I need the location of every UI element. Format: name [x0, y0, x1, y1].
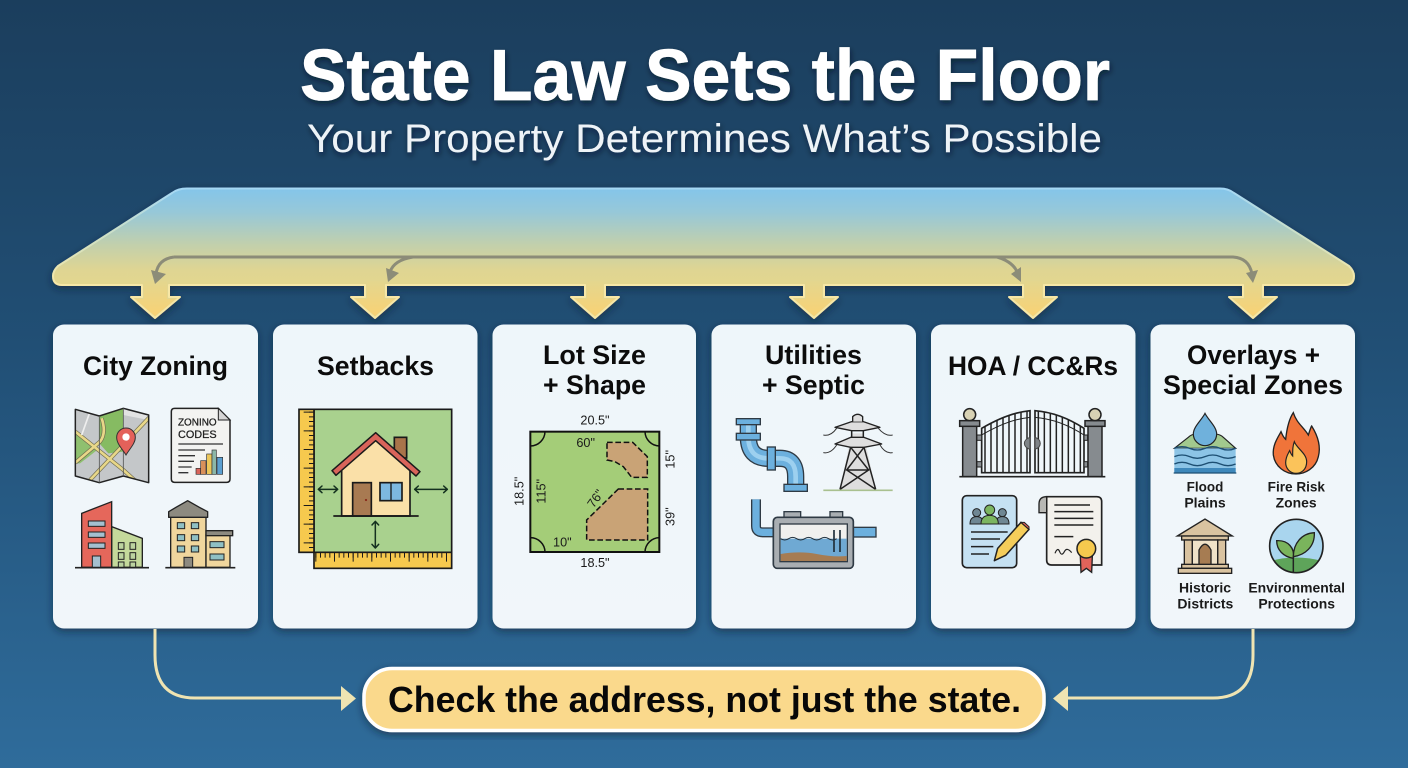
icon: map: [73, 407, 150, 485]
dimension labels: 10": [553, 536, 572, 550]
historic districts label: Districts: [1177, 595, 1234, 611]
icon: zoning codes document: [171, 408, 230, 482]
icon: zoning codes document: ZONINO: [178, 417, 217, 428]
flood plains label: Plains: [1184, 495, 1226, 511]
environmental protections label: Protections: [1258, 595, 1335, 611]
setback arrows: [318, 486, 447, 548]
dimension labels: 20.5": [580, 414, 610, 428]
callout: [364, 668, 1044, 730]
icon: certificate: [1039, 497, 1102, 572]
icon: bottom ruler: [314, 552, 452, 568]
icon: power tower: [823, 414, 893, 490]
heading: [1163, 340, 1343, 400]
icon: left ruler: [299, 409, 314, 552]
card: City Zoning: [53, 324, 258, 628]
heading: + Septic: [762, 370, 865, 400]
historic districts label: [1177, 580, 1234, 611]
utility icons: [736, 414, 893, 568]
card: HOA / CC&Rs: [931, 324, 1136, 628]
card: Utilities + Septic: [712, 324, 916, 628]
dimension labels: 18.5": [580, 556, 610, 570]
icon: environmental circle: [1268, 519, 1325, 575]
arrow tips glow: [135, 281, 1273, 316]
icon: house: [332, 433, 420, 516]
lot outline: [530, 432, 659, 552]
dimension labels: 15": [663, 450, 677, 469]
heading: [762, 340, 865, 400]
grey arrowheads: [151, 267, 1258, 284]
state law floor banner with arrows: [53, 188, 1354, 318]
icon: fire: [1273, 413, 1319, 474]
icon: pipe: [736, 419, 807, 491]
setback diagram: [299, 409, 452, 568]
environmental protections label: [1248, 580, 1345, 611]
icon: zoning codes document: CODES: [178, 429, 217, 441]
card: Setbacks: [273, 324, 478, 628]
zone icons: [1174, 413, 1345, 611]
corner arcs: [530, 432, 659, 552]
heading: Lot Size: [543, 340, 646, 370]
buildable areas: [587, 442, 648, 540]
environmental protections label: Environmental: [1248, 580, 1345, 596]
heading: Setbacks: [317, 351, 434, 381]
icon: flood: [1174, 413, 1236, 473]
icon: apartment building: [165, 501, 235, 568]
fire risk label: Fire Risk: [1268, 479, 1325, 495]
dimension labels: 115": [535, 479, 549, 504]
fire risk label: [1268, 479, 1325, 511]
icon: member form with pencil: [962, 496, 1029, 568]
dimension labels: 18.5": [513, 477, 527, 506]
dimension labels: 39": [663, 507, 677, 526]
card: Overlays + Special Zones: [1150, 324, 1355, 628]
heading: Utilities: [765, 340, 862, 370]
icon: septic tank: [756, 499, 876, 568]
heading: [543, 340, 646, 400]
HOA icons: [959, 409, 1105, 572]
dimension labels: 60": [576, 436, 595, 450]
icon: red and green buildings: [75, 502, 149, 568]
subtitle: Your Property Determines What’s Possible: [307, 117, 1102, 161]
banner trapezoid: [53, 188, 1354, 318]
title: State Law Sets the Floor: [300, 36, 1110, 116]
flood plains label: [1184, 479, 1226, 511]
right connector arrow: [1053, 629, 1253, 711]
historic districts label: Historic: [1179, 580, 1231, 596]
flood plains label: Flood: [1187, 479, 1223, 495]
heading: HOA / CC&Rs: [948, 351, 1118, 381]
dimension labels: [513, 414, 677, 570]
dimension labels: 76": [585, 487, 607, 510]
heading: City Zoning: [83, 351, 228, 381]
callout: Check the address, not just the state.: [388, 679, 1021, 720]
fire risk label: Zones: [1276, 495, 1317, 511]
map pin: [117, 428, 135, 455]
left connector arrow: [155, 629, 356, 711]
icons: [73, 407, 235, 568]
heading: + Shape: [543, 370, 646, 400]
icon: gate: [959, 409, 1105, 477]
icon: historic building: [1177, 519, 1232, 573]
heading: Special Zones: [1163, 370, 1343, 400]
lot: [314, 409, 452, 552]
lot diagram: [513, 414, 677, 570]
grey connector arrows: [156, 257, 1252, 274]
heading: Overlays +: [1187, 340, 1320, 370]
card: Lot Size + Shape: [492, 324, 696, 628]
